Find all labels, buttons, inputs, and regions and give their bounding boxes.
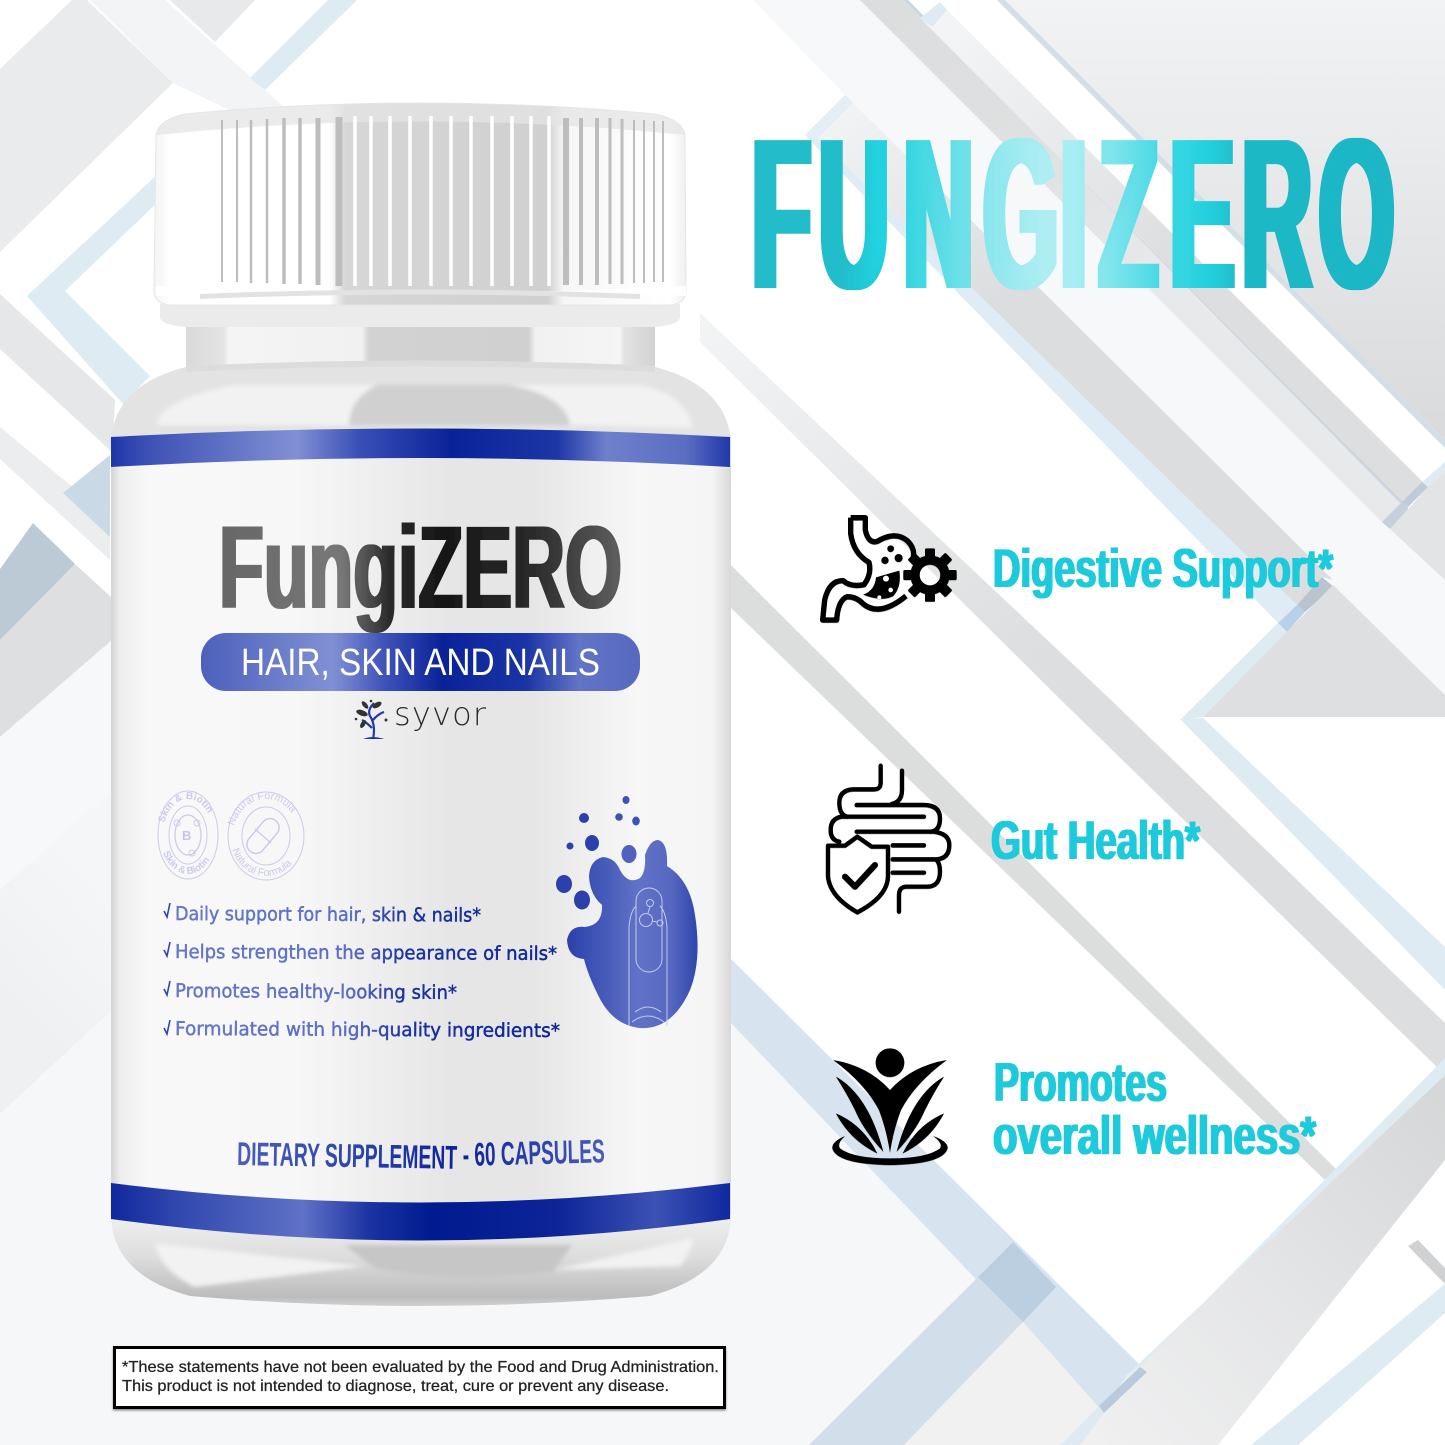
icon: intestines with shield bbox=[828, 766, 949, 912]
bullet 4: Formulated with high-quality ingredients* bbox=[175, 1018, 560, 1042]
disclaimer box: This product is not intended to diagnose, treat, cure or prevent any disease. bbox=[122, 1378, 669, 1395]
syvor logo: syvor bbox=[394, 695, 487, 733]
seal: natural formula: Natural Formula bbox=[228, 792, 295, 826]
bottle body and label bbox=[111, 436, 731, 1220]
cap ribs bbox=[222, 116, 663, 286]
bottom blue band bbox=[111, 1183, 730, 1240]
pill: hair skin and nails bbox=[201, 633, 640, 691]
shield bbox=[828, 837, 888, 912]
neck ring bbox=[160, 304, 680, 327]
bullet 3: Promotes healthy-looking skin* bbox=[175, 980, 457, 1004]
icon: wellness figure bbox=[832, 1048, 948, 1165]
dietary supplement text: DIETARY SUPPLEMENT bbox=[237, 1135, 457, 1176]
dietary supplement text: - 60 CAPSULES bbox=[462, 1132, 605, 1173]
seal: skin and biotin: B bbox=[182, 828, 191, 843]
feature label: promotes overall wellness: Promotes bbox=[994, 1051, 1167, 1113]
icon: stomach with gear bbox=[823, 518, 957, 620]
bottle shoulder bbox=[111, 361, 731, 440]
title: FUNGIZERO bbox=[752, 95, 1394, 334]
bullet 2: Helps strengthen the appearance of nails* bbox=[175, 941, 557, 965]
right upper bands bbox=[1005, 0, 1445, 440]
disclaimer box bbox=[114, 1348, 724, 1408]
seal: natural formula: Natural Formula bbox=[232, 848, 292, 876]
splash bbox=[567, 840, 698, 1028]
shoulder shading bbox=[157, 385, 692, 428]
finger outline bbox=[629, 888, 667, 1026]
right lower bands bbox=[700, 313, 1445, 1075]
disclaimer box: *These statements have not been evaluated by the Food and Drug Administration. bbox=[122, 1359, 719, 1376]
top blue band bbox=[111, 428, 730, 467]
bullet 1: Daily support for hair, skin & nails* bbox=[175, 903, 481, 927]
base shading bbox=[155, 1238, 693, 1287]
benefit list on label bbox=[164, 903, 560, 1042]
seal: skin and biotin: Skin & Biotin bbox=[158, 792, 212, 822]
bottle base bbox=[111, 1215, 731, 1306]
seal: natural formula bbox=[228, 792, 304, 880]
feature label: promotes overall wellness bbox=[993, 1051, 1316, 1166]
check mark bbox=[845, 865, 875, 887]
feature label: gut health: Gut Health* bbox=[991, 809, 1200, 871]
syvor logo bbox=[355, 695, 487, 739]
icon: tree bbox=[355, 700, 388, 739]
nail illustration bbox=[556, 796, 698, 1028]
bottle neck bbox=[186, 318, 655, 368]
cap bbox=[154, 103, 686, 305]
seal: skin and biotin bbox=[158, 790, 218, 880]
gear bbox=[903, 548, 957, 602]
product bottle bbox=[111, 103, 731, 1306]
feature label: promotes overall wellness: overall wellness* bbox=[993, 1104, 1316, 1166]
brand name on label: FungiZERO bbox=[219, 502, 622, 634]
pill: hair skin and nails: HAIR, SKIN AND NAILS bbox=[241, 642, 600, 684]
seal: skin and biotin: Skin & Biotin bbox=[164, 851, 210, 874]
